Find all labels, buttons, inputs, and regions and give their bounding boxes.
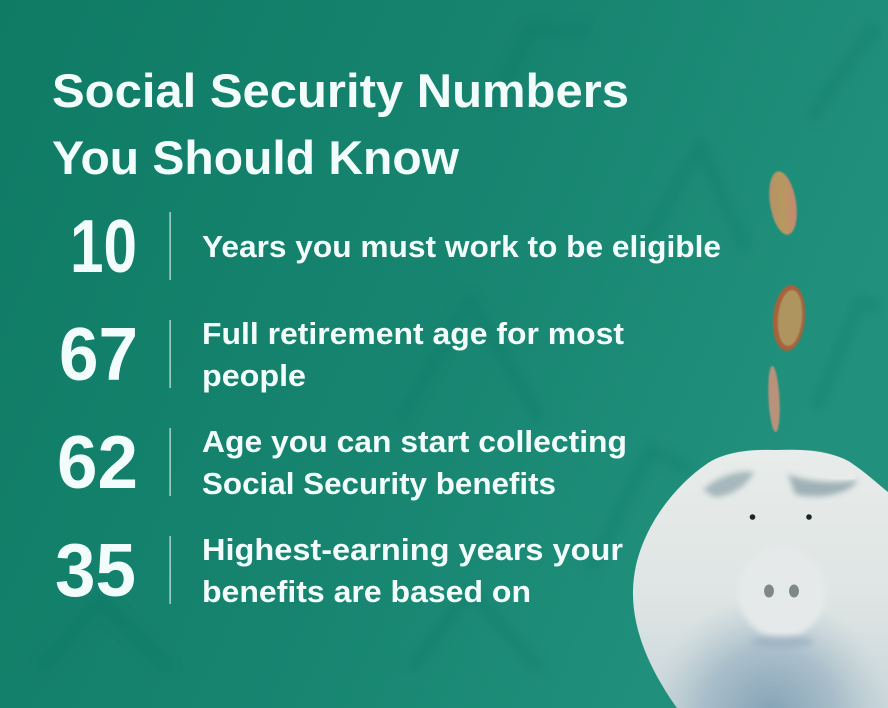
stat: 10 years: Years you must work to be eligible	[202, 229, 721, 264]
title: You Should Know	[52, 131, 459, 184]
title	[52, 64, 629, 184]
stat: 35 highest-earning years: benefits are based on	[202, 574, 531, 609]
stat: 35 highest-earning years	[55, 528, 623, 612]
stat: 67 retirement age	[59, 312, 624, 396]
stat: 62 collecting age: 62	[57, 420, 138, 504]
stat: 10 years	[70, 204, 721, 288]
pig ears	[703, 472, 858, 497]
stat: 62 collecting age	[57, 420, 627, 504]
pig nostrils	[764, 584, 774, 598]
stat: 35 highest-earning years: 35	[55, 528, 136, 612]
stat: 35 highest-earning years: Highest-earning years your	[202, 532, 623, 567]
illustration: piggy bank	[633, 450, 888, 708]
icon: falling coins	[765, 169, 808, 432]
stat: 62 collecting age: Social Security benefits	[202, 466, 556, 501]
stat: 10 years: 10	[70, 204, 137, 288]
pig eyes	[750, 514, 755, 520]
stat: 67 retirement age: people	[202, 358, 306, 393]
stat: 67 retirement age: 67	[59, 312, 138, 396]
stat: 62 collecting age: Age you can start collecting	[202, 424, 627, 459]
title: Social Security Numbers	[52, 64, 629, 117]
stat: 67 retirement age: Full retirement age for most	[202, 316, 624, 351]
pig snout	[738, 546, 826, 638]
